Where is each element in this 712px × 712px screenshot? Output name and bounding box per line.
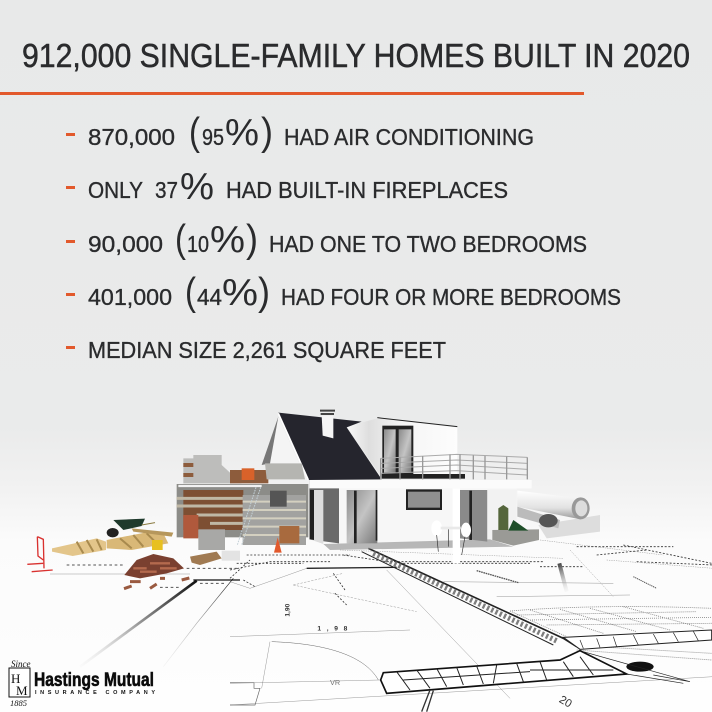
wall: lower hatched xyxy=(381,651,627,693)
roof xyxy=(278,413,382,480)
bullet: air conditioning: 95 xyxy=(202,124,224,150)
orange rule under title xyxy=(0,92,584,95)
bullet: one to two bedrooms xyxy=(66,218,587,261)
pillar xyxy=(453,488,460,563)
leaning materials xyxy=(183,515,198,538)
bullet: air conditioning: ) xyxy=(261,111,273,154)
bullet: air conditioning: ( xyxy=(189,111,200,154)
bullet: median size: MEDIAN SIZE 2,261 SQUARE FEET xyxy=(88,337,446,363)
logo emblem xyxy=(9,659,30,708)
wall: right xyxy=(563,630,712,649)
chimney xyxy=(320,411,335,438)
logo emblem: H xyxy=(11,671,20,686)
brick pile xyxy=(124,554,184,578)
rolled plans xyxy=(517,491,590,528)
logo emblem: M xyxy=(16,683,28,698)
bullet: one to two bedrooms: 10 xyxy=(187,231,209,257)
dark wall: diagonal xyxy=(368,548,577,647)
bullet: one to two bedrooms: % xyxy=(210,219,245,261)
logo emblem: Since xyxy=(11,659,30,669)
logo: Hastings Mutual xyxy=(9,659,155,708)
bullet: one to two bedrooms: ) xyxy=(246,218,258,261)
sack xyxy=(190,552,222,565)
bullet: air conditioning: % xyxy=(225,112,259,154)
bullet: one to two bedrooms: 90,000 xyxy=(88,231,163,257)
ground floor wall xyxy=(338,488,517,543)
plan sheet right xyxy=(538,515,600,538)
upper storey xyxy=(347,418,457,477)
bullet: air conditioning: HAD AIR CONDITIONING xyxy=(284,124,534,150)
plan black marker xyxy=(626,662,654,672)
plan dimension labels: 20 xyxy=(557,694,574,711)
bullet: fireplaces: 37 xyxy=(155,177,178,203)
right wall pier xyxy=(487,489,517,542)
bullet: one to two bedrooms: ( xyxy=(175,218,186,261)
wheelbarrow xyxy=(107,519,155,537)
construction site left xyxy=(27,519,240,667)
bullet: fireplaces: % xyxy=(180,166,214,208)
red barrier xyxy=(27,537,53,572)
bullet: fireplaces xyxy=(66,166,508,208)
house illustration xyxy=(177,411,600,563)
bullet: fireplaces: HAD BUILT-IN FIREPLACES xyxy=(226,177,508,203)
ladder xyxy=(237,487,261,545)
dark column xyxy=(309,480,339,543)
plan dimension labels: 1,90 xyxy=(284,603,291,617)
gable xyxy=(262,417,307,480)
plan dimension labels: VR xyxy=(330,678,340,687)
bullet: four or more bedrooms xyxy=(66,271,621,314)
brick construction wall xyxy=(177,484,308,545)
plan lines left xyxy=(50,573,190,575)
bullet: air conditioning: 870,000 xyxy=(88,124,175,150)
plan dimension labels xyxy=(284,603,574,711)
hatched room xyxy=(510,607,712,660)
bullet: four or more bedrooms: HAD FOUR OR MORE BEDROOMS xyxy=(281,284,621,310)
logo emblem: 1885 xyxy=(10,698,27,708)
logo name: Hastings Mutual xyxy=(34,669,154,691)
concrete block stack xyxy=(198,529,225,550)
planter with plants xyxy=(492,505,539,546)
balcony slab xyxy=(309,480,532,488)
bullet: air conditioning xyxy=(66,111,534,154)
logo tagline: INSURANCE COMPANY xyxy=(35,690,155,696)
bullet: one to two bedrooms: HAD ONE TO TWO BEDROOMS xyxy=(269,231,587,257)
plan dimension labels: 1,98 xyxy=(317,626,348,633)
upper window xyxy=(382,426,413,474)
bullet: four or more bedrooms: 401,000 xyxy=(88,284,172,310)
loose bricks xyxy=(124,578,189,589)
architectural floor plans xyxy=(230,540,712,712)
right door xyxy=(460,490,487,542)
balcony floor and railing xyxy=(381,454,527,479)
yellow bucket xyxy=(152,540,163,550)
bullet: fireplaces: ONLY xyxy=(88,177,143,203)
ground window xyxy=(406,489,442,510)
terrace shadow xyxy=(323,539,513,550)
bullet: four or more bedrooms: ( xyxy=(185,271,196,314)
upper block wall xyxy=(183,455,305,483)
traffic cone xyxy=(274,537,282,553)
bullet: four or more bedrooms: % xyxy=(222,272,258,314)
chairs and table xyxy=(431,520,471,555)
dense plan detail near house xyxy=(230,545,712,605)
plan paper top lines xyxy=(230,540,712,705)
bullet list xyxy=(66,111,621,363)
scaffold planks xyxy=(178,482,262,489)
sliding door xyxy=(347,490,377,543)
bullet: four or more bedrooms: 44 xyxy=(197,284,222,310)
wooden pallets xyxy=(52,528,173,556)
bullet: four or more bedrooms: ) xyxy=(258,271,270,314)
